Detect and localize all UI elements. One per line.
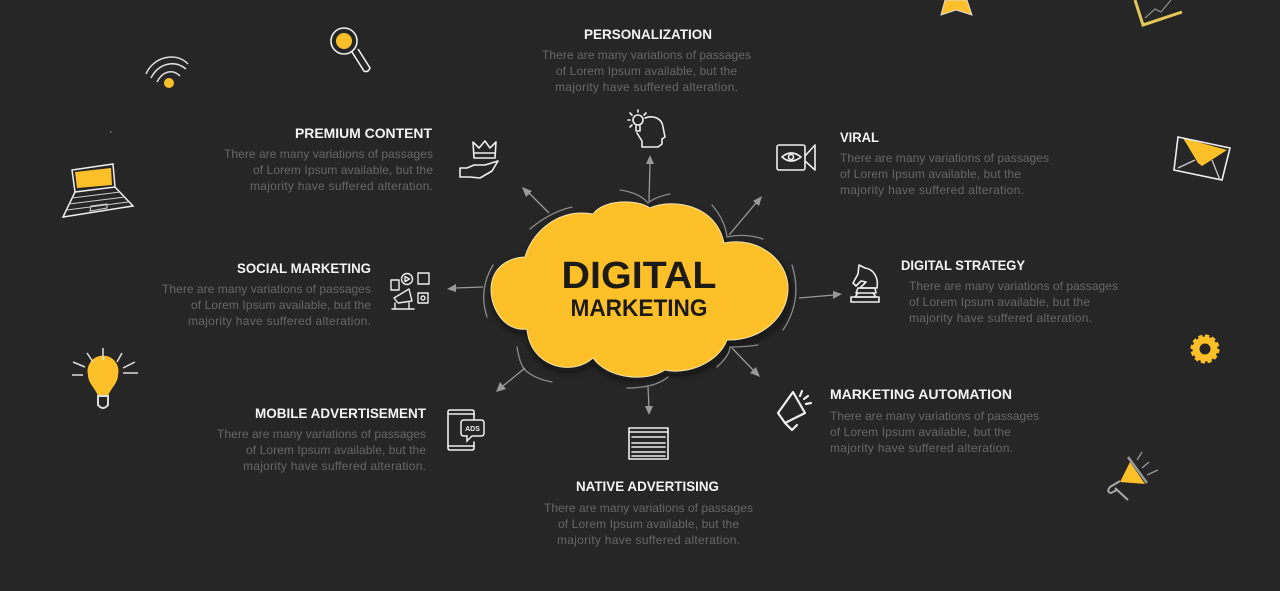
icon: chess knight — [851, 265, 879, 302]
text block: personalization: of Lorem Ipsum available, but the — [556, 64, 737, 78]
text block: premium content: There are many variations of passages — [224, 147, 433, 161]
text block: social marketing — [162, 260, 371, 328]
icon: browser window — [629, 428, 668, 459]
text block: marketing automation: of Lorem Ipsum available, but the — [830, 425, 1011, 439]
text block: marketing automation: majority have suffered alteration. — [830, 441, 1013, 455]
icon: star — [941, 0, 972, 15]
icon: personalization head with bulb — [628, 110, 665, 147]
text block: digital strategy: There are many variations of passages — [909, 279, 1118, 293]
icon: magnifying glass — [331, 28, 370, 72]
text block: marketing automation: There are many variations of passages — [830, 409, 1039, 423]
text block: mobile advertisement: There are many variations of passages — [217, 427, 426, 441]
text block: personalization — [542, 26, 751, 94]
text block: personalization: PERSONALIZATION — [584, 26, 712, 42]
text block: social marketing: There are many variations of passages — [162, 282, 371, 296]
arrow: to mobile advertisement — [496, 368, 525, 392]
text block: social marketing: SOCIAL MARKETING — [237, 260, 371, 276]
text block: mobile advertisement: of Lorem Ipsum available, but the — [246, 443, 426, 457]
text block: mobile advertisement: MOBILE ADVERTISEMENT — [255, 405, 426, 421]
icon: video camera with eye — [777, 145, 815, 170]
text block: native advertising: of Lorem Ipsum available, but the — [558, 517, 739, 531]
icon: phone with ads bubble: ADS — [465, 426, 480, 433]
text block: viral: There are many variations of passages — [840, 151, 1049, 165]
text block: viral: majority have suffered alteration. — [840, 183, 1024, 197]
text block: premium content: PREMIUM CONTENT — [295, 125, 432, 141]
text block: marketing automation: MARKETING AUTOMATION — [830, 386, 1012, 402]
icon: social marketing — [391, 273, 429, 309]
text block: personalization: There are many variations of passages — [542, 48, 751, 62]
text block: premium content — [224, 125, 433, 193]
icon: line chart — [1135, 0, 1182, 25]
icon: yellow megaphone — [1108, 452, 1158, 500]
text block: social marketing: of Lorem Ipsum available, but the — [191, 298, 371, 312]
icon: gear — [1192, 336, 1218, 362]
icon: envelope — [1174, 137, 1230, 180]
text block: personalization: majority have suffered alteration. — [555, 80, 738, 94]
text block: digital strategy: DIGITAL STRATEGY — [901, 257, 1026, 273]
title: marketing: MARKETING — [570, 295, 708, 322]
icon: wifi signal — [146, 57, 188, 88]
icon: phone with ads bubble — [448, 410, 484, 450]
central cloud — [491, 202, 790, 380]
arrow: to marketing automation — [732, 348, 760, 377]
arcs around cloud — [484, 190, 796, 388]
text block: social marketing: majority have suffered alteration. — [188, 314, 371, 328]
icon: light bulb — [72, 348, 138, 408]
icon: crown on hand — [460, 141, 498, 178]
text block: premium content: of Lorem Ipsum available, but the — [253, 163, 433, 177]
arrow: to personalization — [646, 155, 654, 201]
text block: viral — [840, 129, 1049, 197]
text block: digital strategy — [901, 257, 1118, 325]
arrow: to native advertising — [645, 387, 653, 415]
arrow: to viral — [729, 196, 762, 235]
text block: digital strategy: of Lorem Ipsum available, but the — [909, 295, 1090, 309]
arrow: to premium content — [522, 187, 549, 213]
arrow: to digital strategy — [799, 291, 842, 299]
text block: native advertising — [544, 478, 753, 547]
text block: native advertising: There are many variations of passages — [544, 501, 753, 515]
text block: mobile advertisement — [217, 405, 426, 473]
text block: premium content: majority have suffered alteration. — [250, 179, 433, 193]
title: digital: DIGITAL — [562, 255, 716, 297]
arrow: to social marketing — [447, 284, 483, 292]
text block: native advertising: NATIVE ADVERTISING — [576, 478, 719, 494]
text block: viral: VIRAL — [840, 129, 879, 145]
text block: native advertising: majority have suffered alteration. — [557, 533, 740, 547]
text block: viral: of Lorem Ipsum available, but the — [840, 167, 1021, 181]
text block: mobile advertisement: majority have suffered alteration. — [243, 459, 426, 473]
icon: laptop — [63, 164, 133, 217]
icon: megaphone — [778, 391, 811, 430]
text block: digital strategy: majority have suffered alteration. — [909, 311, 1092, 325]
text block: marketing automation — [830, 386, 1039, 455]
